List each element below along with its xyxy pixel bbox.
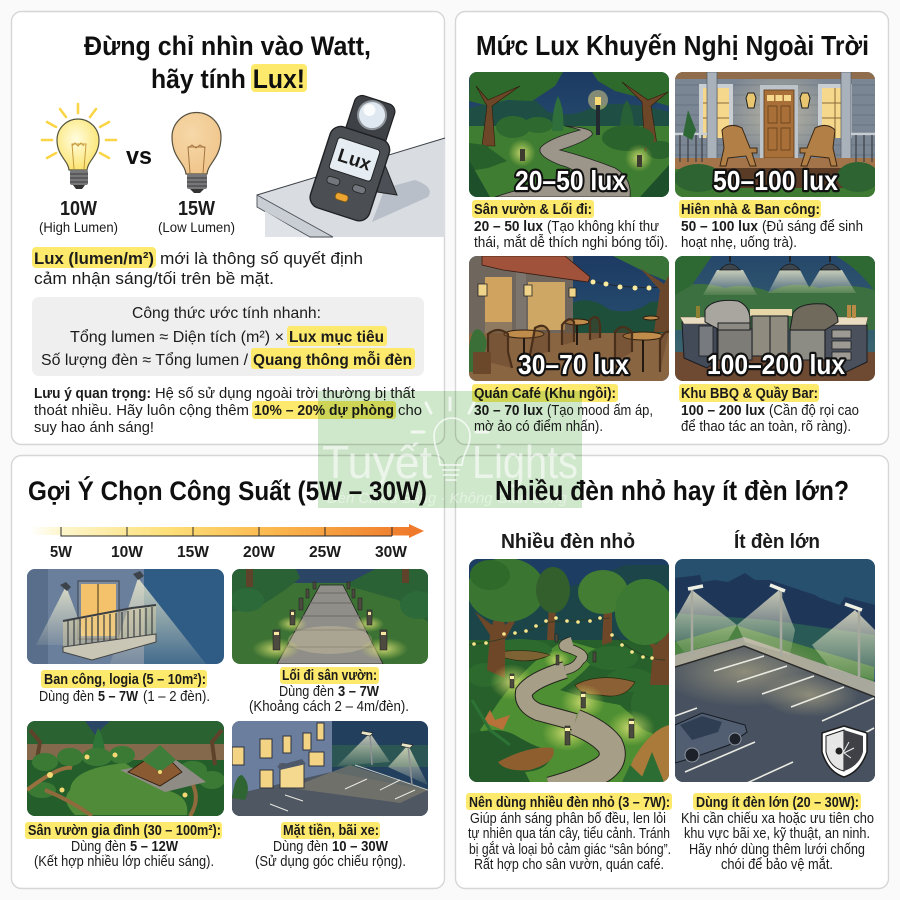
formula box: Lux mục tiêu	[289, 329, 384, 346]
caption: garden and walkway: Sân vườn & Lối đi:	[474, 202, 592, 218]
heading: watt vs lux	[84, 31, 371, 94]
panel: recommended outdoor lux	[456, 12, 888, 444]
subheading: many small lights: Nhiều đèn nhỏ	[501, 531, 635, 553]
chart: wattage scale arrow: 25W	[309, 544, 342, 561]
scene: garden path lights	[230, 569, 436, 664]
caption: facade, parking: Dùng đèn	[273, 839, 328, 855]
note: important reserve margin: thoát nhiều. Hãy luôn cộng thêm	[34, 403, 249, 419]
caption: use few large lights: chói để bảo vệ mắt.	[721, 856, 833, 873]
caption: BBQ and bar: để thao tác an toàn, rõ ràng).	[681, 419, 851, 435]
text: lux definition: cảm nhận sáng/tối trên bề mặt.	[34, 269, 274, 288]
caption: facade, parking: (Sử dụng góc chiếu rộng).	[255, 854, 406, 870]
panel: don't just look at watt	[12, 12, 445, 444]
label: 15W low lumen: (Low Lumen)	[158, 219, 235, 235]
label: 100-200 lux: 100–200 lux	[707, 349, 845, 380]
chart: wattage scale arrow: 20W	[243, 544, 276, 561]
caption: porch and balcony	[679, 200, 863, 251]
label: 10W high lumen: 10W	[60, 198, 97, 220]
scene: BBQ bar 100-200 lux	[675, 256, 875, 381]
scene: garden path 20-50 lux	[469, 72, 674, 197]
caption: porch and balcony: 50 – 100 lux	[681, 219, 758, 235]
note: important reserve margin: suy hao ánh sáng!	[34, 420, 154, 436]
label: versus: vs	[126, 143, 152, 170]
caption: garden path	[249, 667, 409, 715]
caption: use few large lights: Dùng ít đèn lớn (20 – 30W):	[696, 795, 859, 811]
text: lux definition	[32, 247, 363, 288]
caption: porch and balcony: (Đủ sáng để sinh	[762, 219, 863, 235]
caption: BBQ and bar: Khu BBQ & Quầy Bar:	[681, 386, 818, 402]
caption: garden path: (Khoảng cách 2 – 4m/đèn).	[249, 699, 409, 715]
caption: cafe seating: (Tạo mood ấm áp,	[547, 403, 653, 419]
formula box: Số lượng đèn ≈ Tổng lumen /	[41, 351, 249, 369]
caption: garden path: Dùng đèn	[279, 684, 334, 700]
label: 10W high lumen	[39, 198, 118, 235]
caption: use few large lights: Hãy nhớ dùng thêm lưới chống	[689, 842, 865, 858]
formula box: Tổng lumen ≈ Diện tích (m²) ×	[70, 328, 284, 346]
caption: garden path: 3 – 7W	[338, 684, 379, 700]
label: 30-70 lux: 30–70 lux	[518, 349, 629, 380]
scene: porch 50-100 lux	[674, 65, 879, 197]
scene: few large lights parking lot	[660, 559, 875, 783]
caption: use many small lights: Nên dùng nhiều đèn nhỏ (3 – 7W):	[469, 795, 670, 811]
heading: wattage selection: Gợi Ý Chọn Công Suất (5W – 30W)	[28, 475, 427, 506]
chart: wattage scale arrow: 5W	[50, 544, 73, 561]
caption: use many small lights: tự nhiên qua tán cây, tiểu cảnh. Tránh	[468, 826, 670, 842]
watermark: Tuyet Lights	[318, 391, 582, 508]
chart: wattage scale arrow: 10W	[111, 544, 144, 561]
caption: home garden: 5 – 12W	[130, 839, 178, 855]
chart: wattage scale arrow: 30W	[375, 544, 408, 561]
watermark: Tuyet Lights: Lights	[472, 436, 578, 488]
caption: garden and walkway	[472, 200, 668, 251]
scene: many small lights garden	[467, 558, 679, 790]
note: important reserve margin: cho	[398, 403, 422, 419]
caption: use many small lights: bị gắt và loại bỏ cảm giác “sân bóng”.	[469, 841, 671, 858]
caption: cafe seating: 30 – 70 lux	[474, 403, 543, 419]
note: important reserve margin: Hệ số sử dụng ngoài trời thường bị thất	[155, 386, 415, 402]
caption: use many small lights: Rất hợp cho sân vườn, quán café.	[474, 857, 664, 873]
caption: use few large lights: Khi cần chiếu xa hoặc ưu tiên cho	[681, 811, 874, 827]
scene: home garden	[27, 721, 225, 816]
label: 50-100 lux: 50–100 lux	[713, 165, 838, 196]
caption: facade, parking: Mặt tiền, bãi xe:	[283, 823, 379, 839]
caption: balcony, loggia	[39, 670, 210, 705]
caption: balcony, loggia: (1 – 2 đèn).	[143, 689, 210, 705]
scene: balcony	[27, 569, 224, 664]
caption: garden and walkway: 20 – 50 lux	[474, 219, 543, 235]
caption: home garden: (Kết hợp nhiều lớp chiếu sáng).	[34, 854, 214, 870]
panel: many small vs few big	[456, 456, 888, 888]
note: important reserve margin	[34, 386, 422, 436]
caption: garden and walkway: thái, mắt dễ thích nghi bóng tối).	[474, 234, 668, 251]
note: important reserve margin: Lưu ý quan trọng:	[34, 386, 151, 402]
heading: watt vs lux: hãy tính Lux!	[151, 64, 305, 94]
text: lux definition: mới là thông số quyết định	[160, 249, 363, 268]
panel: wattage suggestions	[12, 456, 444, 888]
formula box: Quang thông mỗi đèn	[253, 350, 412, 369]
text: lux definition: Lux (lumen/m²)	[34, 249, 154, 268]
caption: balcony, loggia: Dùng đèn	[39, 689, 94, 705]
caption: cafe seating: Quán Café (Khu ngồi):	[474, 386, 616, 402]
label: 10W high lumen: (High Lumen)	[39, 219, 118, 235]
caption: use many small lights: Giúp ánh sáng phân bố đều, len lỏi	[470, 811, 666, 827]
caption: cafe seating	[472, 384, 653, 435]
caption: facade, parking	[255, 822, 406, 870]
label: 15W low lumen	[158, 198, 235, 235]
chart: wattage scale arrow	[30, 524, 424, 561]
formula box: Công thức ước tính nhanh:	[132, 305, 321, 322]
icon: dim 15W bulb	[158, 113, 235, 235]
caption: use many small lights	[466, 793, 672, 873]
caption: home garden	[25, 822, 222, 870]
icon: bright 10W bulb	[39, 104, 118, 235]
caption: porch and balcony: hoạt nhẹ, uống trà).	[681, 235, 797, 251]
subheading: few large lights: Ít đèn lớn	[734, 530, 820, 553]
scene: cafe patio 30-70 lux	[469, 256, 669, 381]
caption: use few large lights	[681, 793, 874, 873]
note: important reserve margin: 10% – 20% dự phòng	[254, 403, 394, 419]
illustration: lux meter on table: Lux	[335, 145, 374, 176]
caption: garden and walkway: (Tạo không khí thư	[547, 219, 659, 235]
label: 15W low lumen: 15W	[178, 198, 215, 220]
caption: porch and balcony: Hiên nhà & Ban công:	[681, 202, 820, 218]
caption: use few large lights: khu vực bãi xe, kỹ thuật, an ninh.	[684, 826, 870, 842]
caption: BBQ and bar	[679, 384, 859, 435]
caption: home garden: Dùng đèn	[71, 839, 126, 855]
scene: facade and parking	[232, 721, 428, 816]
watermark: Tuyet Lights: Tuyết	[322, 436, 432, 488]
caption: garden path: Lối đi sân vườn:	[282, 668, 377, 684]
caption: BBQ and bar: 100 – 200 lux	[681, 403, 765, 419]
caption: BBQ and bar: (Cần độ rọi cao	[769, 403, 859, 419]
watermark: Tuyet Lights: Đèn Chiếu Sáng · Không Gian Sống	[327, 490, 568, 507]
heading: many small or few big: Nhiều đèn nhỏ hay ít đèn lớn?	[495, 475, 849, 506]
caption: balcony, loggia: 5 – 7W	[98, 689, 138, 705]
formula box	[32, 297, 424, 376]
caption: home garden: Sân vườn gia đình (30 – 100m²):	[28, 823, 221, 839]
chart: wattage scale arrow: 15W	[177, 544, 210, 561]
label: 20-50 lux: 20–50 lux	[515, 165, 626, 196]
heading: watt vs lux: Đừng chỉ nhìn vào Watt,	[84, 31, 371, 61]
caption: balcony, loggia: Ban công, logia (5 – 10m²):	[44, 672, 206, 688]
illustration: lux meter on table	[257, 89, 445, 237]
caption: facade, parking: 10 – 30W	[332, 839, 388, 855]
caption: cafe seating: mờ ảo có điểm nhấn).	[474, 419, 603, 435]
